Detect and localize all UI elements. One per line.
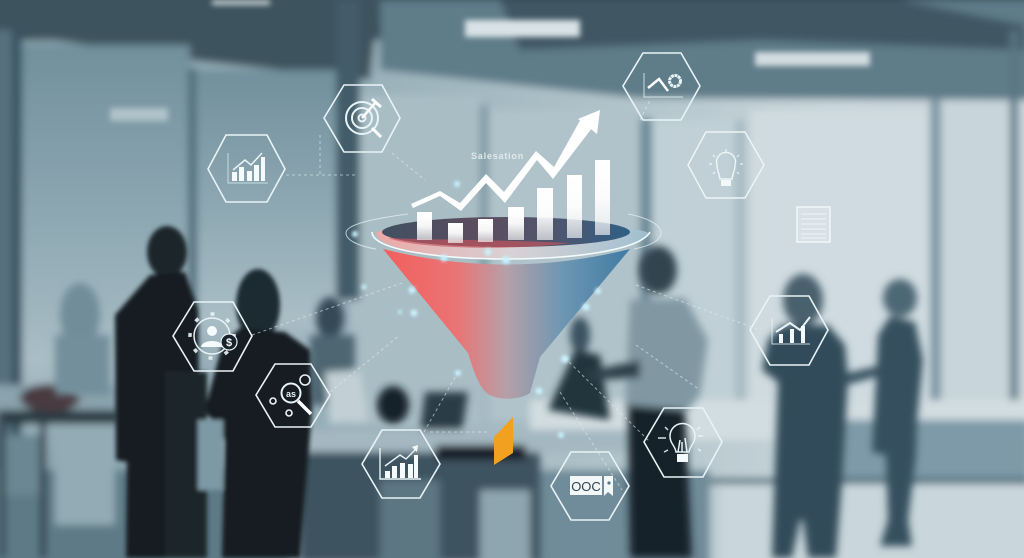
mouth red reflection [388,238,570,248]
chart label: Salesation [471,151,524,161]
trend arrow [411,110,600,211]
hexagon: light bulb, lower right [644,408,722,477]
rim highlight [372,232,650,259]
icon: magnifying glass with nodes: as [286,389,296,399]
orange parallelogram below spout [494,417,513,465]
document icon [797,207,830,242]
hexagon: bar chart, right [750,296,828,365]
background people and desk [55,283,635,558]
funnel mouth [382,217,630,247]
glowing nodes [352,181,601,438]
funnel cone [383,249,630,399]
hexagon: bar chart, upper left [208,135,285,202]
icon: light bulb with rays [658,424,703,462]
icon: rising chart with arrow [380,445,421,479]
funnel lip [376,225,648,259]
sales funnel [346,181,661,438]
hexagon: person with dollar gear [173,302,252,371]
icon: line chart and gear [644,73,683,97]
hexagon: bar chart, lower centre [362,430,440,498]
dashed connector lines [252,100,760,490]
ceiling lights [110,0,870,121]
hexagon: light bulb, upper right [688,132,764,198]
icon: rising chart [772,317,810,344]
growth chart rising from funnel [411,110,610,243]
hexagon: chart with gear [623,53,700,120]
chart bars [417,160,610,243]
icon: rising bar chart [228,153,268,183]
hexagon: OOC tag [551,452,629,520]
icon: light bulb [709,149,743,186]
people in foreground [115,226,312,558]
hexagon: target, upper centre [324,85,400,152]
icon: label tag with location pin: OOC [571,479,601,494]
hexagon: magnifier [256,364,330,427]
icon: target with arrow [346,99,381,137]
icon: person, gear and dollar: $ [226,337,232,349]
orbit ring [346,214,661,249]
